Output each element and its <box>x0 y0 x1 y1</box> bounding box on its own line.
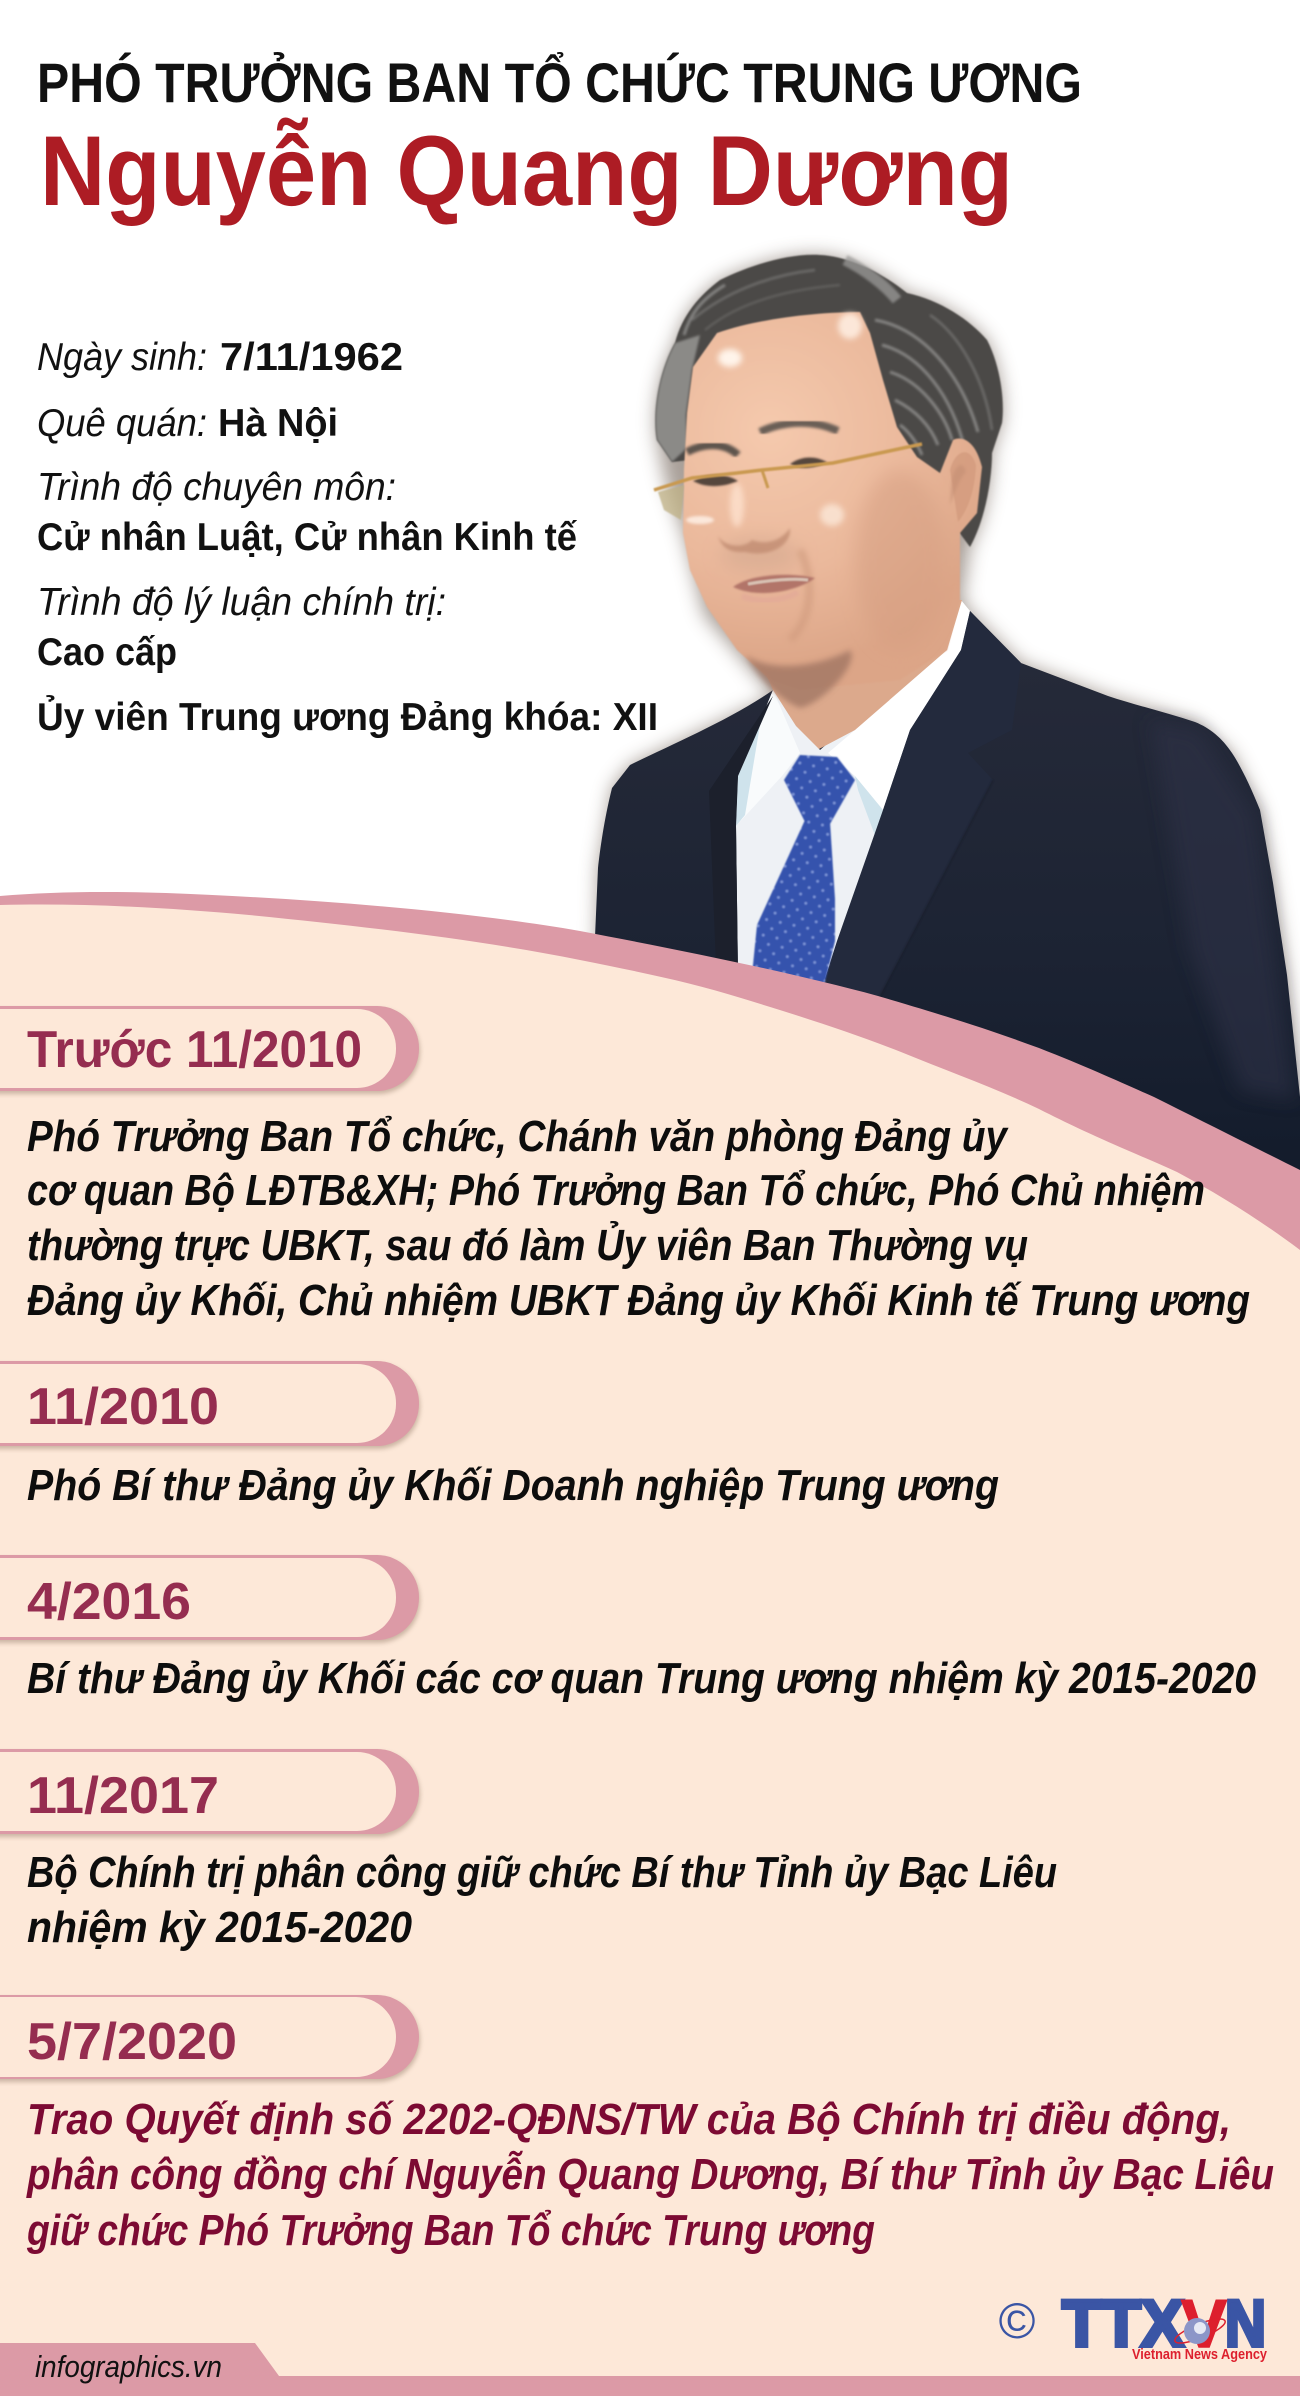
political theory value: Cao cấp <box>37 631 177 674</box>
date of birth: Ngày sinh: <box>37 336 207 379</box>
hometown: Hà Nội <box>218 402 338 445</box>
description <box>27 1848 1057 1952</box>
suit jacket <box>594 611 1300 1240</box>
agency name: Vietnam News Agency <box>1132 2347 1267 2363</box>
nose bridge highlight <box>730 483 744 527</box>
timeline entry: 11/2010 <box>0 1361 999 1510</box>
expertise value: Cử nhân Luật, Cử nhân Kinh tế <box>37 516 577 559</box>
timeline entry: 5/7/2020 <box>0 1995 1274 2255</box>
date of birth: 7/11/1962 <box>220 336 403 379</box>
description: Phó Trưởng Ban Tổ chức, Chánh văn phòng Đảng ủy <box>27 1112 1009 1161</box>
footer band <box>0 2343 1300 2396</box>
cream panel <box>0 905 1300 2396</box>
skin <box>683 312 982 690</box>
portrait illustration <box>594 255 1300 1240</box>
description: Bộ Chính trị phân công giữ chức Bí thư Tỉnh ủy Bạc Liêu <box>27 1848 1057 1897</box>
date badge: Trước 11/2010 <box>27 1021 362 1079</box>
right eye <box>790 457 827 468</box>
date badge: 5/7/2020 <box>27 2013 237 2071</box>
hometown: Quê quán: <box>37 402 207 445</box>
expertise label: Trình độ chuyên môn: <box>37 466 396 509</box>
chin shadow <box>745 650 852 708</box>
left eyebrow <box>687 445 738 455</box>
tie knot <box>784 755 855 824</box>
date badge <box>0 1995 420 2082</box>
left lens <box>658 485 684 520</box>
political theory label: Trình độ lý luận chính trị: <box>37 581 446 624</box>
description: nhiệm kỳ 2015-2020 <box>27 1903 412 1952</box>
letter N: N <box>1225 2286 1266 2360</box>
forehead highlights <box>718 349 742 367</box>
website credit: infographics.vn <box>35 2349 222 2384</box>
personal information block <box>37 336 658 739</box>
letter V: V <box>1181 2286 1227 2362</box>
cheek and temple shading <box>855 470 945 650</box>
soft halo <box>596 255 1300 1200</box>
orbit and globe <box>1172 2314 1228 2348</box>
lapel seam <box>878 780 993 1000</box>
description <box>27 1112 1250 1325</box>
description: Phó Bí thư Đảng ủy Khối Doanh nghiệp Trung ương <box>27 1461 999 1510</box>
nose <box>718 528 790 553</box>
ear shadow <box>950 452 976 522</box>
glasses temple and bridge <box>654 444 922 490</box>
tie <box>752 755 855 990</box>
pink strip and tab <box>0 2343 1300 2396</box>
date badge <box>0 1555 420 1643</box>
date badge <box>0 1006 420 1094</box>
right eyebrow <box>760 423 838 432</box>
mouth <box>733 575 815 593</box>
title: position: PHÓ TRƯỞNG BAN TỔ CHỨC TRUNG ƯƠNG <box>37 51 1082 114</box>
right collar <box>828 600 970 810</box>
date badge <box>0 1361 420 1449</box>
shirt <box>736 611 970 985</box>
sleeve shading <box>1150 720 1295 1100</box>
left lapel <box>709 696 773 975</box>
pink arc <box>0 892 1300 2396</box>
highlighted description: giữ chức Phó Trưởng Ban Tổ chức Trung ương <box>26 2206 875 2255</box>
hair grey streaks <box>684 260 992 455</box>
left collar <box>736 690 800 826</box>
description: thường trực UBKT, sau đó làm Ủy viên Ban Thường vụ <box>27 1219 1028 1270</box>
left eye <box>693 475 738 486</box>
hair mass <box>656 255 1003 547</box>
timeline entry: 11/2017 <box>0 1749 1057 1952</box>
right lapel <box>823 611 1021 1000</box>
tie blade <box>752 820 835 990</box>
letters TTX: TTX <box>1062 2286 1184 2360</box>
cheek highlight <box>820 504 844 526</box>
highlighted description <box>26 2095 1274 2255</box>
date badge <box>0 1749 420 1837</box>
neck <box>760 600 962 749</box>
timeline entry: 4/2016 <box>0 1555 1256 1703</box>
copyright symbol: © <box>999 2293 1036 2349</box>
title: name: Nguyễn Quang Dương <box>40 115 1013 226</box>
face <box>683 312 982 708</box>
timeline entry: before 11/2010 <box>0 1006 1250 1325</box>
left grey hair patch <box>656 335 700 462</box>
date badge: 11/2010 <box>27 1378 219 1436</box>
date badge: 4/2016 <box>27 1573 191 1631</box>
lower panel with pink arc <box>0 892 1300 2396</box>
central committee term: Ủy viên Trung ương Đảng khóa: XII <box>37 695 658 739</box>
logo: TTXVN <box>1062 2286 1267 2363</box>
glasses <box>654 444 922 520</box>
date badge: 11/2017 <box>27 1767 219 1825</box>
nasolabial shadow <box>790 550 809 640</box>
